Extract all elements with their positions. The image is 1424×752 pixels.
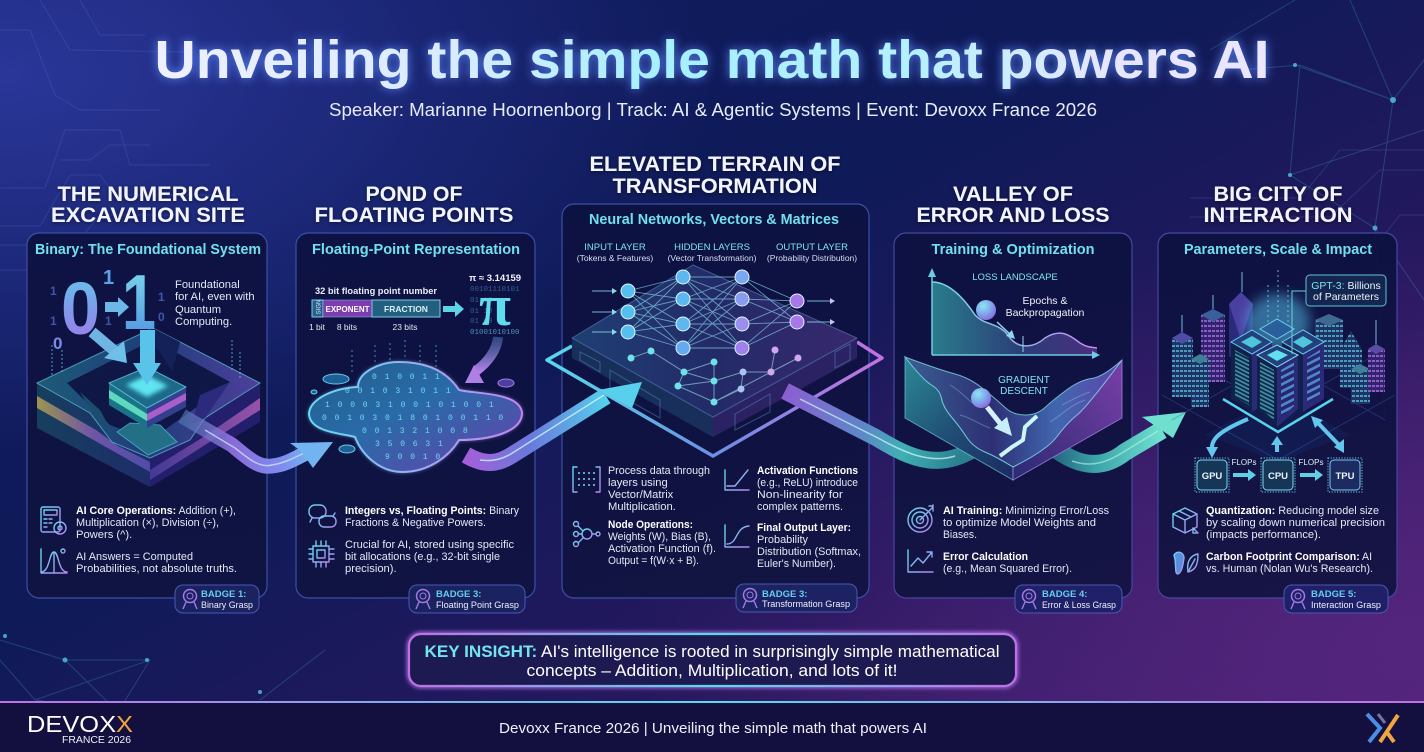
heading: pond: POND OF bbox=[366, 183, 463, 206]
text: node operations: Output = f(W·x + B). bbox=[608, 555, 699, 567]
text: training: AI Training: Minimizing Error/Loss bbox=[943, 505, 1109, 517]
bit layout bar: 8 bits bbox=[337, 322, 357, 332]
text: activation: Activation Functions bbox=[757, 465, 858, 477]
binary digits in pond: 0 0 1 0 3 0 1 8 0 1 0 0 1 1 0 bbox=[322, 414, 505, 423]
text: core operations: Multiplication (×), Division (÷), bbox=[76, 517, 219, 529]
platform graph bbox=[628, 346, 802, 406]
chips: GPU bbox=[1202, 471, 1222, 482]
arrow head: into platform bbox=[598, 382, 642, 408]
text: foundational note bbox=[175, 279, 255, 328]
small binary digits bbox=[50, 267, 165, 353]
panel title: binary: Binary: The Foundational System bbox=[35, 241, 261, 258]
label: gradient descent bbox=[998, 375, 1050, 397]
text: node operations: Weights (W), Bias (B), bbox=[608, 531, 711, 543]
glow and data stream bbox=[1246, 294, 1310, 350]
back tower bbox=[1260, 319, 1294, 339]
network connections bbox=[592, 277, 833, 348]
heading: big city: BIG CITY OF bbox=[1214, 183, 1343, 206]
badge 4: BADGE 4: bbox=[1042, 589, 1087, 600]
binary digits in pond: 3 5 0 6 3 1 bbox=[375, 440, 444, 449]
text: final layer: Distribution (Softmax, bbox=[757, 546, 861, 558]
chips: TPU bbox=[1336, 471, 1355, 482]
binary digits in pond: 0 0 1 3 2 1 0 0 8 bbox=[362, 427, 469, 436]
heading: valley: ERROR AND LOSS bbox=[916, 204, 1110, 227]
text: activation: Non-linearity for bbox=[757, 489, 843, 501]
arrows: chips to city bbox=[1212, 419, 1340, 452]
text: training: to optimize Model Weights and bbox=[943, 517, 1096, 529]
text: crucial bbox=[345, 539, 514, 575]
small binary digits: 1 bbox=[50, 284, 57, 298]
callout: key insight: concepts – Addition, Multiplication, and lots of it! bbox=[526, 661, 898, 680]
subtitle: Speaker: Marianne Hoornenborg | Track: AI & Agentic Systems | Event: Devoxx France 2026 bbox=[329, 99, 1097, 120]
chips: CPU bbox=[1268, 471, 1288, 482]
panel: floating points bbox=[296, 233, 535, 598]
text: core operations bbox=[76, 505, 236, 541]
text: activation bbox=[757, 465, 858, 513]
illustration: gradient descent terrain bbox=[905, 357, 1122, 480]
text: answers: Probabilities, not absolute truths. bbox=[76, 563, 237, 575]
text: process data: Vector/Matrix bbox=[608, 489, 674, 501]
icon: calculator bbox=[41, 507, 66, 534]
text: integers: Integers vs, Floating Points: Binary bbox=[345, 505, 519, 517]
text: node operations: Activation Function (f). bbox=[608, 543, 716, 555]
badge 1: BADGE 1: bbox=[201, 589, 246, 600]
layer labels: (Vector Transformation) bbox=[668, 253, 757, 263]
pi symbol with binary digits: 01001010100 bbox=[470, 329, 520, 337]
layer labels bbox=[577, 242, 857, 263]
text: foundational note: Computing. bbox=[175, 316, 232, 328]
panel: interaction bbox=[1158, 233, 1397, 598]
text: node operations: Node Operations: bbox=[608, 519, 693, 531]
heading: numerical excavation site: EXCAVATION SITE bbox=[51, 204, 245, 227]
icon: relu bbox=[725, 470, 749, 490]
label: epochs: Epochs & bbox=[1023, 295, 1067, 307]
text: quantization bbox=[1206, 505, 1385, 541]
small binary digits: 0 bbox=[158, 310, 165, 324]
heading: big city bbox=[1204, 183, 1352, 227]
text: quantization: (impacts performance). bbox=[1206, 529, 1321, 541]
descent arrow bbox=[987, 407, 1003, 427]
heading: elevated terrain: ELEVATED TERRAIN OF bbox=[590, 153, 841, 176]
illustration: neural network platform bbox=[547, 242, 882, 456]
binary digits in pond: 1 0 0 0 3 1 0 0 1 0 1 0 0 1 bbox=[325, 401, 495, 410]
badge 3: Transformation Grasp bbox=[762, 599, 850, 610]
text: process data: Multiplication. bbox=[608, 501, 676, 513]
text: crucial: bit allocations (e.g., 32-bit single bbox=[345, 551, 500, 563]
text: training: Biases. bbox=[943, 529, 977, 541]
panel title: floating point: Floating-Point Representation bbox=[312, 241, 520, 258]
label: epochs: Backpropagation bbox=[1006, 307, 1085, 319]
arrow: bar to pi bbox=[443, 301, 464, 317]
text: error calculation: (e.g., Mean Squared Error). bbox=[943, 563, 1072, 575]
text: carbon bbox=[1206, 551, 1373, 575]
badge 3: BADGE 3: bbox=[762, 589, 807, 600]
chips bbox=[1195, 458, 1362, 492]
icon: bell curve bbox=[41, 549, 67, 573]
icon: sigmoid bbox=[725, 525, 749, 547]
heading: valley bbox=[916, 183, 1110, 227]
text: process data: layers using bbox=[608, 477, 668, 489]
text: final layer bbox=[757, 522, 861, 570]
heading: big city: INTERACTION bbox=[1204, 204, 1352, 227]
layer labels: INPUT LAYER bbox=[584, 242, 646, 253]
callout: key insight: KEY INSIGHT: AI's intelligence is rooted in surprisingly simple mathematical bbox=[424, 642, 1000, 661]
text: integers bbox=[345, 505, 519, 529]
callout: GPT-3 bbox=[1292, 275, 1386, 354]
network nodes bbox=[621, 270, 804, 355]
binary digits in pond: 9 0 0 1 0 bbox=[385, 453, 442, 462]
arrow: 0 to pit bbox=[92, 332, 116, 352]
text: carbon: Carbon Footprint Comparison: AI bbox=[1206, 551, 1372, 563]
layer labels: OUTPUT LAYER bbox=[776, 242, 848, 253]
label: gradient descent: GRADIENT bbox=[998, 375, 1050, 386]
heading: elevated terrain: TRANSFORMATION bbox=[612, 175, 818, 198]
pi symbol with binary digits: 01 00 bbox=[470, 318, 493, 326]
chips: FLOPs bbox=[1299, 458, 1323, 467]
icon: package bbox=[1173, 508, 1198, 533]
panel title: parameters: Parameters, Scale & Impact bbox=[1184, 241, 1372, 258]
binary digits in pond bbox=[322, 373, 505, 462]
icon: matrix bbox=[573, 467, 600, 492]
text: process data: Process data through bbox=[608, 465, 710, 477]
left tower bbox=[1231, 330, 1272, 412]
text: quantization: Quantization: Reducing model size bbox=[1206, 505, 1379, 517]
arrow: 0 to 1 bbox=[105, 297, 129, 317]
arrow: valley to city bbox=[1050, 412, 1186, 464]
heading: pond: FLOATING POINTS bbox=[314, 204, 514, 227]
footer text: Devoxx France 2026 | Unveiling the simple math that powers AI bbox=[499, 721, 927, 737]
text: final layer: Euler's Number). bbox=[757, 558, 836, 570]
arrow: 1 down bbox=[133, 330, 161, 385]
panel: binary bbox=[27, 233, 267, 598]
pi symbol with binary digits: π bbox=[479, 273, 511, 338]
heading: numerical excavation site: THE NUMERICAL bbox=[58, 183, 239, 206]
text: final layer: Final Output Layer: bbox=[757, 522, 851, 534]
callout: GPT-3: of Parameters bbox=[1313, 291, 1379, 303]
badge 2: Floating Point Grasp bbox=[436, 600, 519, 611]
text: final layer: Probability bbox=[757, 534, 808, 546]
front tower bbox=[1257, 345, 1298, 427]
small binary digits: 1 bbox=[103, 267, 114, 289]
background buildings bbox=[1172, 272, 1385, 407]
footer logo: devoxx: FRANCE 2026 bbox=[62, 735, 131, 746]
bit layout bar: SIGN bbox=[316, 300, 322, 314]
badge 2 bbox=[409, 585, 525, 613]
layer labels: HIDDEN LAYERS bbox=[674, 242, 750, 253]
text: crucial: precision). bbox=[345, 563, 397, 575]
arrow: platform to valley bbox=[785, 391, 972, 460]
text: process data bbox=[608, 465, 710, 513]
small binary digits: 1 bbox=[50, 314, 57, 328]
left face bbox=[905, 357, 1013, 480]
text: foundational note: Quantum bbox=[175, 304, 221, 316]
text: error calculation: Error Calculation bbox=[943, 551, 1028, 563]
bit layout bar: EXPONENT bbox=[326, 304, 370, 314]
pi symbol with binary digits: 01 10 bbox=[470, 297, 493, 305]
text: activation: complex patterns. bbox=[757, 501, 843, 513]
badge 3 bbox=[736, 584, 857, 612]
callout: GPT-3: GPT-3: Billions bbox=[1311, 280, 1381, 292]
badge 2: BADGE 3: bbox=[436, 589, 481, 600]
icon: footprint bbox=[1174, 552, 1198, 574]
text: core operations: Powers (^). bbox=[76, 529, 132, 541]
text: node operations bbox=[608, 519, 716, 567]
text: error calculation bbox=[943, 551, 1072, 575]
footer logo: x mark bbox=[1367, 714, 1398, 742]
icon: number conversion bbox=[309, 505, 336, 527]
text: training bbox=[943, 505, 1109, 541]
badge 4 bbox=[1015, 585, 1122, 613]
bit layout bar: 23 bits bbox=[392, 322, 418, 332]
heading: pond bbox=[314, 183, 514, 227]
bit layout bar bbox=[309, 300, 440, 332]
label: loss landscape: LOSS LANDSCAPE bbox=[972, 272, 1058, 283]
badge 5: BADGE 5: bbox=[1311, 589, 1356, 600]
heading: numerical excavation site bbox=[51, 183, 245, 227]
panel title: training: Training & Optimization bbox=[932, 241, 1094, 258]
bit layout bar: 1 bit bbox=[309, 322, 326, 332]
icon: chip bbox=[309, 541, 334, 567]
footer logo: devoxx: DEVOX X bbox=[27, 711, 133, 737]
title: Unveiling the simple math that powers AI bbox=[154, 30, 1270, 90]
text: answers: AI Answers = Computed bbox=[76, 551, 193, 563]
text: carbon: vs. Human (Nolan Wu's Research). bbox=[1206, 563, 1373, 575]
panel: error and loss bbox=[894, 233, 1132, 598]
small binary digits: 1 bbox=[105, 314, 112, 328]
small binary digits: 0 bbox=[53, 334, 62, 353]
icon: node bbox=[574, 522, 600, 546]
illustration: pond of floats bbox=[309, 273, 522, 472]
layer labels: (Probability Distribution) bbox=[767, 253, 857, 263]
chips: FLOPs bbox=[1232, 458, 1256, 467]
bit layout bar: FRACTION bbox=[384, 304, 428, 314]
text: foundational note: for AI, even with bbox=[175, 291, 255, 303]
label: gradient descent: DESCENT bbox=[1000, 386, 1048, 397]
illustration: city of servers bbox=[1162, 270, 1395, 492]
binary digits in pond: 0 0 1 0 3 1 0 1 1 bbox=[345, 387, 452, 396]
icon: error chart bbox=[908, 550, 933, 572]
text: foundational note: Foundational bbox=[175, 279, 240, 291]
badge 5 bbox=[1284, 585, 1388, 613]
badge 1 bbox=[175, 585, 259, 613]
text: answers bbox=[76, 551, 237, 575]
binary digits in pond: 0 1 0 0 1 1 bbox=[372, 373, 441, 382]
illustration: excavation site bbox=[37, 258, 260, 487]
text: core operations: AI Core Operations: Addition (+), bbox=[76, 505, 236, 517]
pi label: π ≈ 3.14159 bbox=[469, 273, 521, 284]
right tower bbox=[1282, 330, 1324, 412]
text: quantization: by scaling down numerical precision bbox=[1206, 517, 1385, 529]
ball bbox=[976, 300, 996, 320]
pi symbol with binary digits: 01 10 bbox=[470, 308, 493, 316]
digit 1: 1 bbox=[122, 258, 156, 346]
label: 32-bit number: 32 bit floating point number bbox=[315, 286, 437, 297]
pi symbol with binary digits bbox=[470, 273, 520, 338]
arrow: pond to terrain bbox=[466, 395, 606, 463]
badge 5: Interaction Grasp bbox=[1311, 600, 1381, 611]
right face bbox=[1013, 360, 1122, 480]
arrow: pi into pond bbox=[476, 337, 498, 371]
illustration: loss landscape chart bbox=[928, 268, 1100, 359]
label: epochs bbox=[1006, 295, 1085, 319]
heading: elevated terrain bbox=[590, 153, 841, 198]
arrow: excavation to pond bbox=[182, 416, 333, 468]
text: activation: (e.g., ReLU) introduce bbox=[757, 477, 858, 489]
text: crucial: Crucial for AI, stored using specific bbox=[345, 539, 514, 551]
small binary digits: 1 bbox=[158, 290, 165, 304]
panel: transformation bbox=[562, 204, 869, 598]
callout: key insight bbox=[409, 634, 1016, 686]
heading: valley: VALLEY OF bbox=[953, 183, 1073, 206]
valley surface bbox=[905, 357, 1122, 467]
digit 0: 0 bbox=[61, 267, 100, 350]
panel title: neural networks: Neural Networks, Vectors & Matrices bbox=[589, 211, 839, 228]
badge 4: Error & Loss Grasp bbox=[1042, 600, 1116, 611]
layer labels: (Tokens & Features) bbox=[577, 253, 653, 263]
text: integers: Fractions & Negative Powers. bbox=[345, 517, 486, 529]
badge 1: Binary Grasp bbox=[201, 600, 253, 611]
footer bar bbox=[0, 701, 1424, 752]
icon: target bbox=[908, 505, 933, 532]
river bbox=[1000, 416, 1037, 456]
pi symbol with binary digits: 00101110101 bbox=[470, 286, 520, 294]
